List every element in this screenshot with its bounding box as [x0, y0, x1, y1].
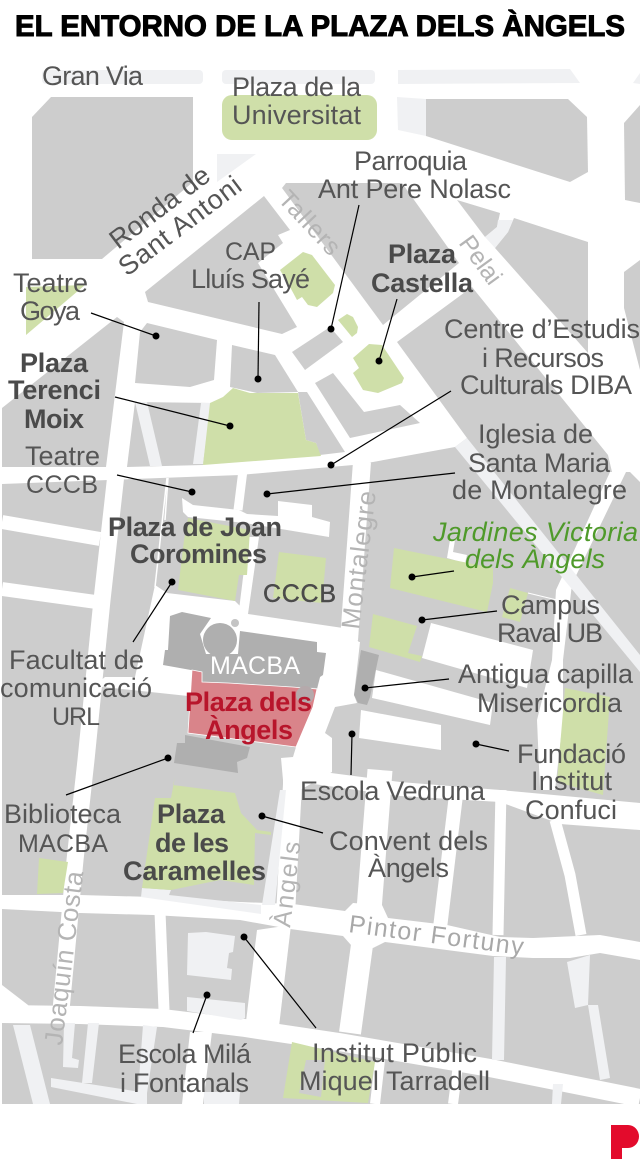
- place labels: Convent dels: [329, 826, 488, 856]
- bold plaza labels: Plaza: [157, 799, 226, 829]
- place labels: Lluís Sayé: [191, 264, 310, 294]
- place labels: i Recursos: [482, 343, 604, 373]
- place labels: Institut Públic: [312, 1038, 477, 1068]
- place labels: MACBA: [18, 830, 108, 858]
- place labels: Biblioteca: [4, 799, 122, 829]
- place labels: Gran Via: [42, 61, 144, 91]
- place labels: Campus: [501, 590, 600, 620]
- place labels: Teatre: [25, 441, 100, 471]
- place labels: CCCB: [26, 471, 98, 499]
- place labels: Raval UB: [497, 618, 603, 648]
- place labels: URL: [52, 703, 100, 731]
- place labels: Miquel Tarradell: [299, 1066, 490, 1096]
- bold plaza labels: [8, 239, 474, 886]
- streets: [2, 462, 640, 1104]
- label: Jardines Victoria dels Àngels: Jardines Victoria: [432, 517, 638, 547]
- place labels: Escola Vedruna: [300, 776, 486, 806]
- label: Jardines Victoria dels Àngels: [432, 517, 638, 574]
- place labels: Àngels: [368, 853, 449, 883]
- green areas: [26, 95, 610, 1103]
- place labels: Antigua capilla: [458, 659, 634, 689]
- bold plaza labels: Plaza de Joan: [108, 512, 282, 542]
- highlighted label: Plaza dels Àngels: Plaza dels: [185, 687, 312, 717]
- street names: [38, 185, 526, 1047]
- logo: [611, 1125, 639, 1159]
- place labels: Culturals DIBA: [460, 370, 632, 400]
- place labels: MACBA: [210, 652, 300, 680]
- place labels: Misericordia: [477, 688, 623, 718]
- place labels: CCCB: [263, 580, 336, 608]
- place labels: CAP: [225, 238, 276, 266]
- place labels: Facultat de: [9, 645, 144, 675]
- Antigua capilla building: [354, 650, 379, 705]
- street names: Pintor Fortuny: [347, 910, 526, 961]
- street names: Montalegre: [335, 489, 382, 631]
- title: EL ENTORNO DE LA PLAZA DELS ÀNGELS: [15, 9, 625, 43]
- highlighted label: Plaza dels Àngels: Àngels: [205, 714, 293, 745]
- place labels: Ant Pere Nolasc: [318, 174, 511, 204]
- place labels: Goya: [20, 296, 81, 326]
- place labels: Fundació: [517, 739, 626, 769]
- place labels: Institut: [531, 766, 612, 796]
- bold plaza labels: Moix: [24, 404, 84, 434]
- label: Jardines Victoria dels Àngels: dels Àngels: [465, 544, 605, 574]
- bold plaza labels: Caramelles: [123, 856, 266, 886]
- place labels: Sant Antoni: [113, 170, 247, 282]
- place labels: Santa Maria: [468, 448, 611, 478]
- place labels: Iglesia de: [478, 419, 593, 449]
- bold plaza labels: Castella: [371, 268, 474, 298]
- bold plaza labels: de les: [155, 828, 229, 858]
- Biblioteca MACBA building: [174, 735, 250, 773]
- bold plaza labels: Terenci: [8, 375, 101, 405]
- place labels: Confuci: [525, 795, 617, 825]
- street names: Joaquín Costa: [38, 869, 89, 1047]
- place labels: i Fontanals: [120, 1068, 249, 1098]
- MACBA building: [163, 612, 326, 688]
- street names: Pelai: [453, 230, 508, 290]
- callout lines and dots: [66, 205, 509, 1033]
- bold plaza labels: Plaza: [20, 348, 89, 378]
- highlighted label: Plaza dels Àngels: [185, 687, 312, 745]
- place labels: Teatre: [13, 268, 88, 298]
- place labels: comunicació: [0, 673, 152, 703]
- place labels: Escola Milá: [118, 1039, 252, 1069]
- place labels: Parroquia: [354, 146, 468, 176]
- place labels: Centre d’Estudis: [444, 314, 640, 344]
- Plaza dels Àngels area: [188, 670, 317, 747]
- place labels: Plaza de la: [232, 72, 362, 102]
- street names: Àngels: [267, 840, 306, 929]
- street names: Tallers: [273, 185, 346, 261]
- bold plaza labels: Coromines: [130, 539, 267, 569]
- bold plaza labels: Plaza: [388, 239, 457, 269]
- place labels: Universitat: [232, 100, 361, 130]
- place labels: de Montalegre: [452, 475, 627, 505]
- place labels: Ronda de: [104, 160, 216, 255]
